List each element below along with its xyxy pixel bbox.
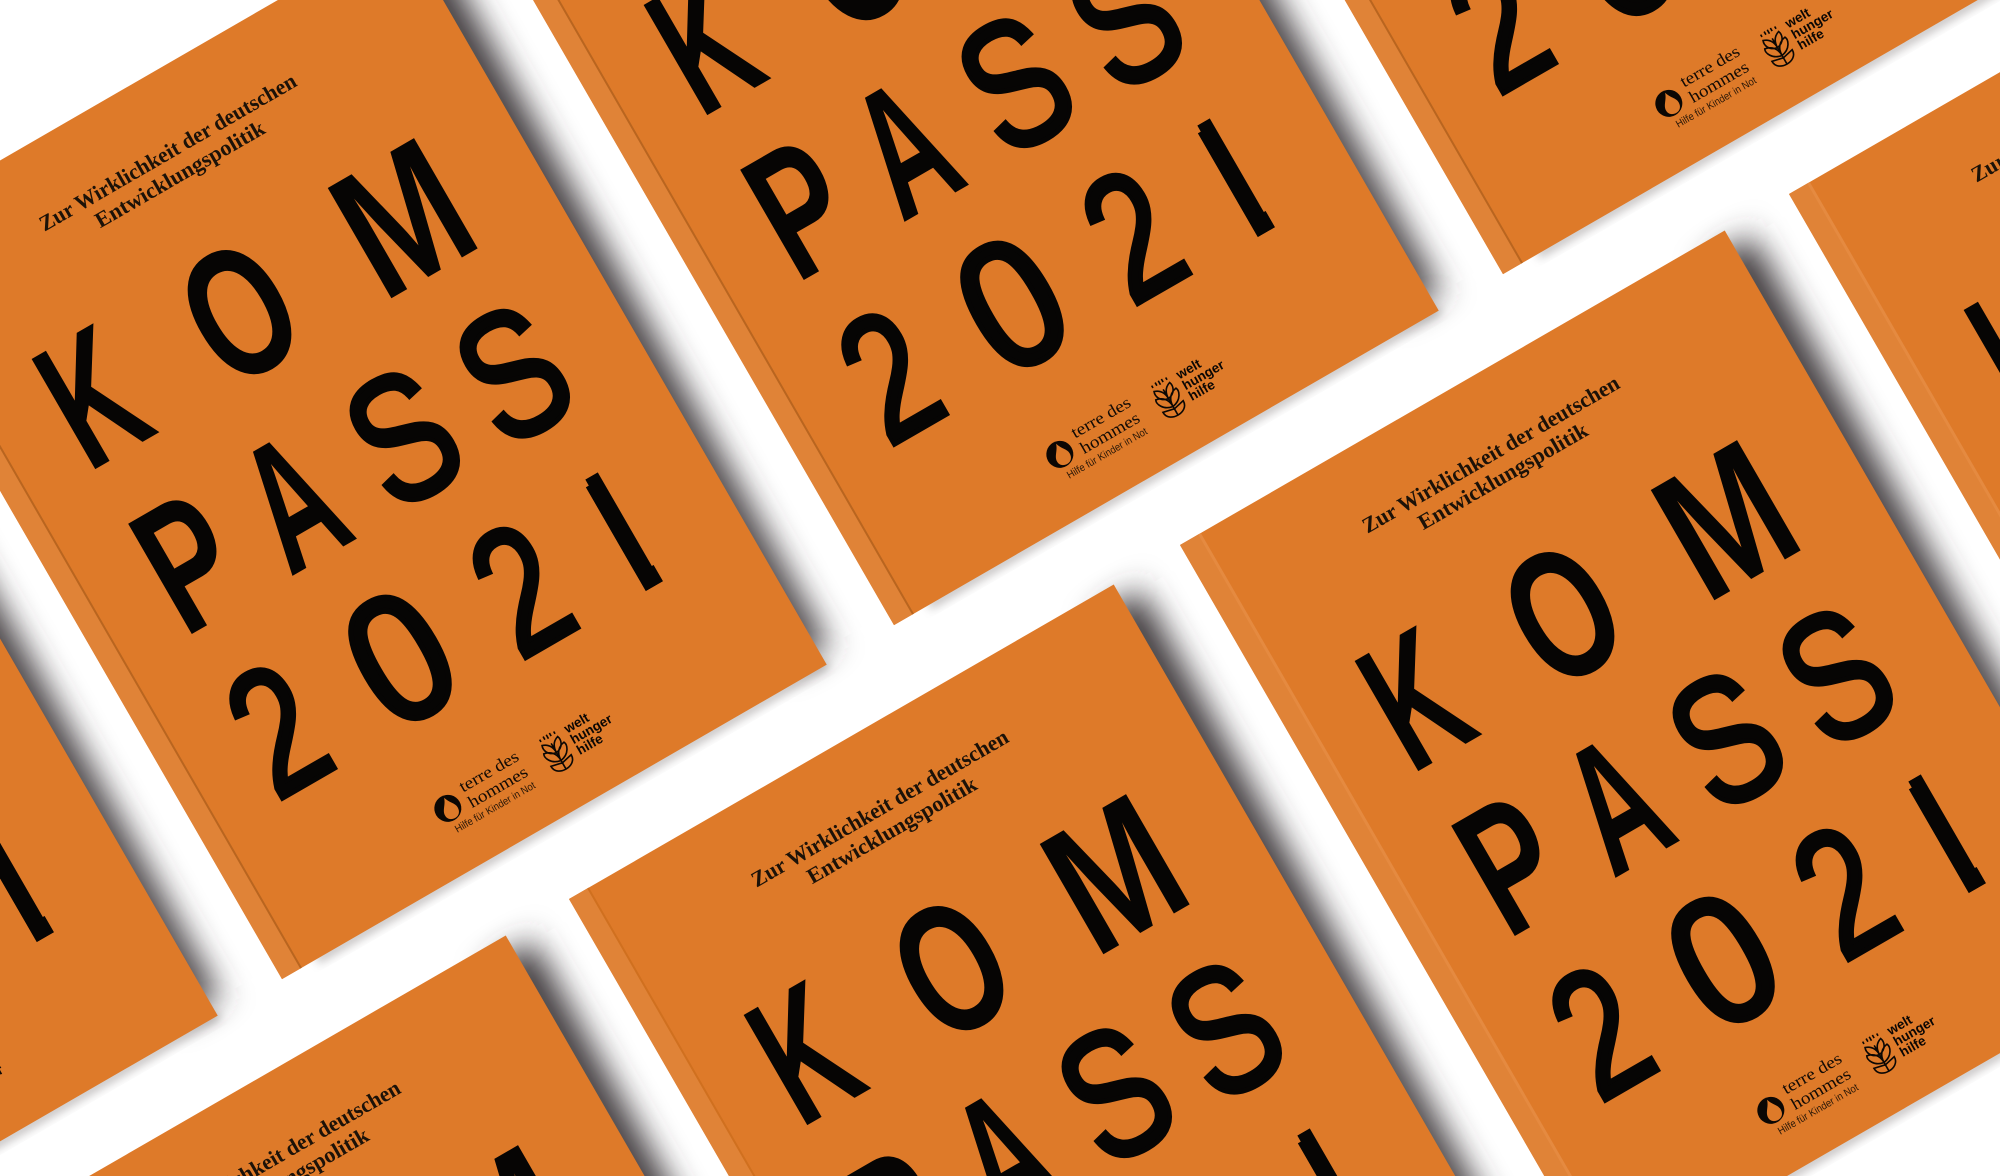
logo: welt hunger hilfe: hilfe — [574, 731, 606, 758]
logo: terre des hommes: hommes — [1788, 1064, 1854, 1114]
logo: welt hunger hilfe: hunger — [1789, 6, 1836, 42]
title letters: K — [1328, 589, 1503, 809]
title letters: S — [1746, 566, 1927, 787]
title letters: K — [5, 287, 180, 507]
title letters — [715, 749, 1419, 1176]
subtitle: Entwicklungspolitik — [802, 771, 982, 889]
logo: terre des hommes: hommes — [465, 762, 531, 812]
logo: welt hunger hilfe — [1857, 1002, 1946, 1077]
logo: welt hunger hilfe: hunger — [1180, 357, 1227, 393]
logo: terre des hommes — [426, 747, 538, 840]
logo: terre des hommes: hommes — [1077, 408, 1143, 458]
title letters: 0 — [1634, 851, 1813, 1070]
title letters: 2 — [1761, 785, 1927, 997]
title letters: 2 — [807, 269, 972, 481]
logo: welt hunger hilfe: welt — [1884, 1012, 1915, 1039]
book: bottom left — [0, 925, 949, 1176]
spine — [469, 0, 914, 625]
cover — [569, 584, 1539, 1176]
title letters: A — [819, 39, 991, 258]
logo: welt hunger hilfe — [1755, 0, 1844, 70]
spine — [569, 888, 1014, 1176]
cover — [0, 936, 931, 1176]
title letters — [615, 0, 1319, 484]
title letters: O — [146, 198, 334, 426]
title letters: 0 — [311, 549, 490, 768]
title letters: 2 — [1518, 925, 1683, 1137]
logo: welt hunger hilfe — [534, 700, 623, 775]
book shadow — [1122, 0, 2000, 258]
logo: terre des hommes: Hilfe für Kinder in Not — [1674, 75, 1759, 130]
title letters: S — [313, 328, 494, 548]
logo: terre des hommes: terre des — [1068, 393, 1134, 442]
logo: terre des hommes: Hilfe für Kinder in Not — [1776, 1082, 1861, 1137]
cover — [469, 0, 1439, 625]
spine — [1789, 182, 2000, 930]
logo: terre des hommes — [1749, 1049, 1861, 1142]
book shadow — [0, 0, 847, 963]
title letters: 2 — [195, 623, 360, 835]
title letters: S — [1135, 920, 1316, 1141]
subtitle: Zur Wirklichkeit der deutschen — [746, 724, 1013, 892]
logo: terre des hommes: Hilfe für Kinder in Not — [453, 780, 538, 835]
cover — [1789, 0, 2000, 930]
logo: terre des hommes: hommes — [1686, 57, 1752, 107]
logo: welt hunger hilfe: welt — [1173, 356, 1204, 383]
title letters: K — [717, 943, 892, 1163]
title letters: P — [1425, 755, 1598, 975]
title letters: 1 — [526, 422, 707, 646]
spine — [0, 232, 302, 979]
title letters: M — [300, 99, 506, 337]
title letters — [3, 93, 707, 838]
title letters — [1224, 0, 1928, 133]
logo: terre des hommes: terre des — [456, 747, 522, 796]
logo: welt hunger hilfe: hunger — [1891, 1013, 1938, 1049]
book shadow — [490, 941, 941, 1176]
logo: terre des hommes: terre des — [1779, 1049, 1845, 1098]
book shadow — [1224, 236, 2000, 1176]
logo: terre des hommes — [1038, 393, 1150, 486]
title letters: 0 — [923, 195, 1102, 414]
subtitle: Entwicklungspolitik — [1413, 417, 1593, 535]
book: centre right — [1180, 220, 2000, 1176]
cover — [1078, 0, 2000, 274]
cover — [0, 0, 827, 979]
spine — [1180, 533, 1626, 1176]
logo: welt hunger hilfe: hilfe — [1795, 26, 1827, 53]
book: top right — [1078, 0, 2000, 278]
subtitle: Entwicklungspolitik — [90, 115, 270, 233]
title letters: 1 — [1138, 68, 1319, 292]
title letters: M — [1012, 755, 1218, 993]
cover — [1180, 230, 2000, 1176]
title letters: S — [1636, 630, 1817, 850]
book: bottom centre — [569, 574, 1557, 1176]
spine — [1078, 0, 1523, 274]
title letters: A — [207, 393, 379, 612]
book shadow — [0, 285, 238, 1176]
title letters: S — [423, 264, 604, 485]
logo: welt hunger hilfe: hilfe — [1186, 377, 1218, 404]
logo: welt hunger hilfe — [1146, 346, 1235, 421]
logo: terre des hommes: Hilfe für Kinder in Not — [1065, 426, 1150, 481]
book: upper left — [0, 0, 847, 983]
title letters: O — [1469, 500, 1657, 728]
book: far right — [1789, 0, 2000, 930]
subtitle: Zur Wirklichkeit der deutschen — [34, 68, 301, 236]
title letters: P — [714, 99, 887, 319]
title letters: A — [1530, 695, 1702, 914]
title letters — [1326, 395, 2000, 1140]
title letters: M — [1623, 401, 1829, 639]
logo: terre des hommes: terre des — [1677, 42, 1743, 91]
book shadow — [513, 0, 1459, 609]
logo: terre des hommes — [1647, 42, 1759, 135]
logo: welt hunger hilfe: welt — [561, 710, 592, 737]
logo: welt hunger hilfe: welt — [1782, 5, 1813, 32]
title letters: P — [102, 453, 275, 673]
book: lower left — [0, 269, 238, 1176]
book shadow — [1098, 590, 1549, 1176]
subtitle: Zur Wirklichkeit der deutschen — [1357, 370, 1624, 538]
title letters: 2 — [1050, 129, 1216, 341]
logo: welt hunger hilfe: hilfe — [1897, 1033, 1929, 1060]
cover — [0, 280, 218, 1176]
book: top centre — [469, 0, 1459, 629]
title letters: O — [858, 854, 1046, 1082]
logo: welt hunger hilfe: hunger — [568, 711, 615, 747]
title letters: 2 — [438, 483, 604, 695]
